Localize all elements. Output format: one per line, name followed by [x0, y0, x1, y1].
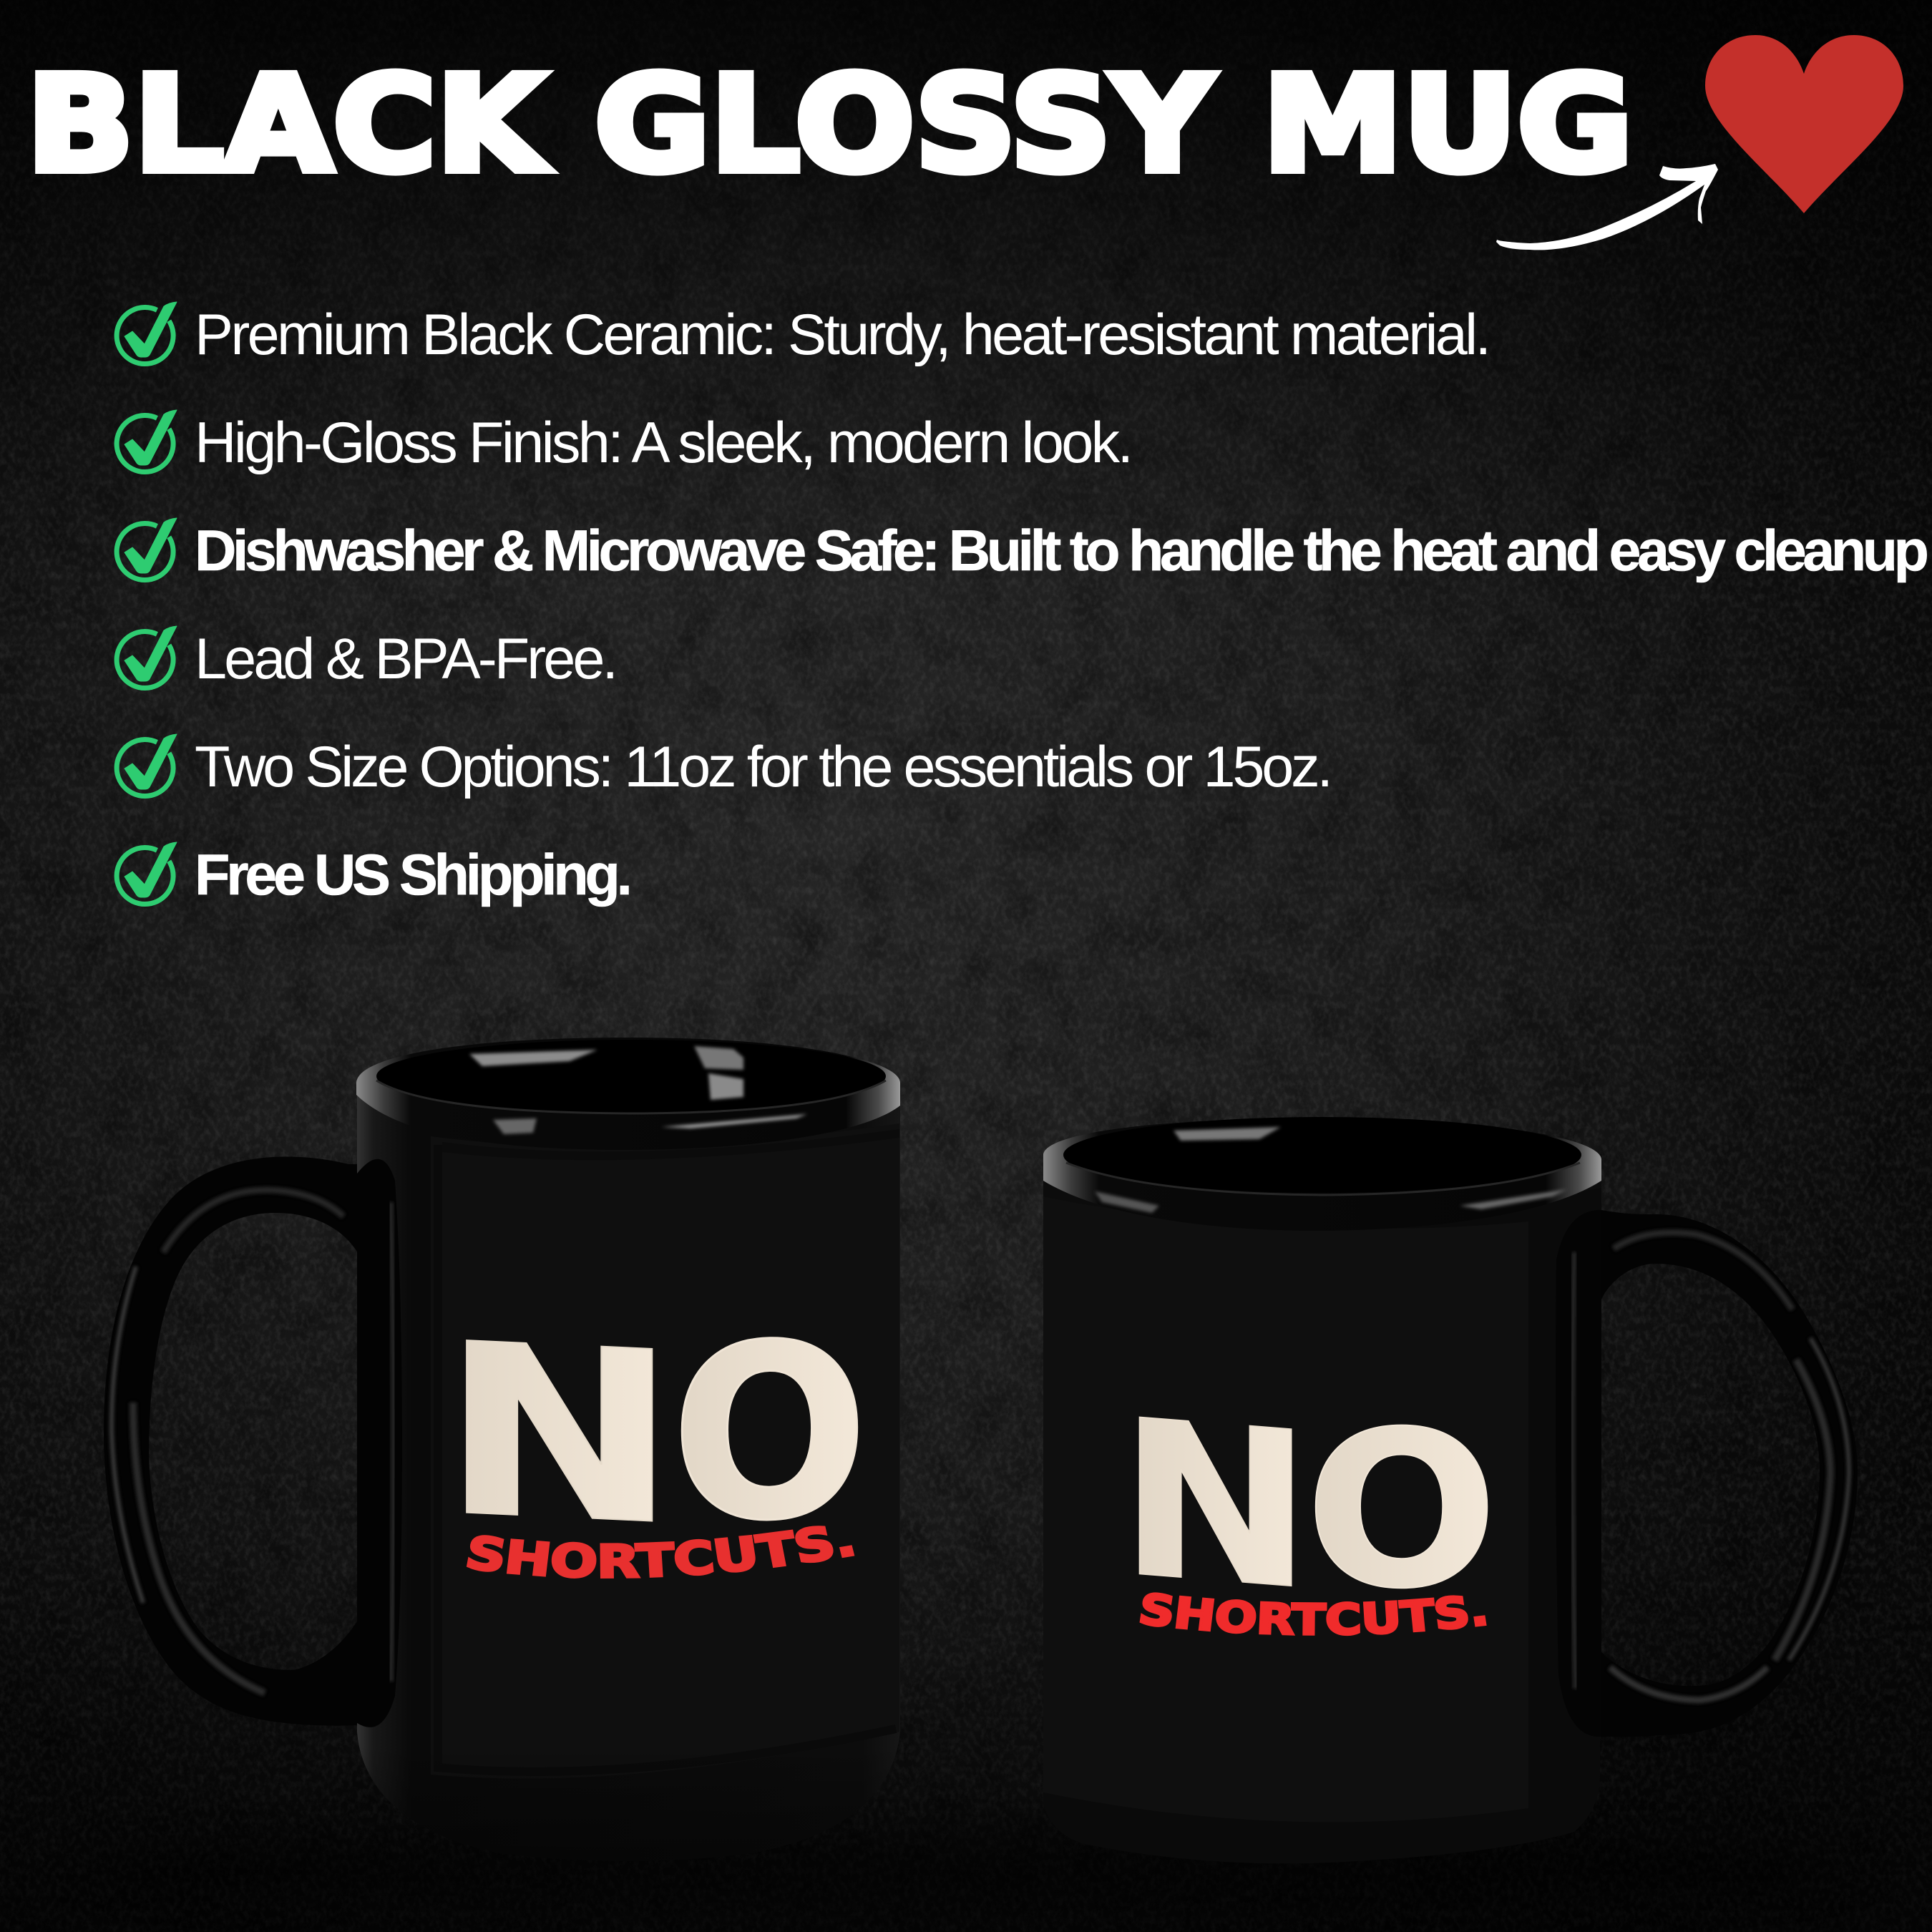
left mug print panel [431, 1123, 899, 1779]
right mug body [1043, 1154, 1601, 1863]
left mug (15oz) [104, 1038, 900, 1816]
left mug print: NO [441, 1292, 869, 1579]
floor shadow beneath mugs [72, 1825, 1860, 1911]
right mug print: NO: O [1304, 1385, 1498, 1636]
right mug print: NO: N [1118, 1373, 1312, 1638]
feature 3: Dishwasher & Microwave Safe: Built to handle the heat and easy cleanup [195, 519, 1929, 583]
left mug print: NO: N [441, 1292, 678, 1579]
right mug handle joint [1556, 1210, 1601, 1737]
feature 2: High-Gloss Finish: A sleek, modern look. [195, 411, 1133, 475]
right mug rim [1043, 1117, 1601, 1231]
right mug print: SHORTCUTS.: SHORTCUTS. [1139, 1592, 1487, 1636]
right mug print panel [1043, 1189, 1528, 1823]
left mug lower shading [357, 1083, 900, 1861]
left mug print: NO: O [670, 1292, 869, 1576]
right mug print: NO [1118, 1373, 1498, 1638]
feature 5: Two Size Options: 11oz for the essentials or 15oz. [195, 735, 1333, 799]
left mug handle [104, 1156, 365, 1726]
arrow pointing to heart [1496, 164, 1718, 250]
left mug rim [356, 1038, 900, 1150]
right mug handle [1592, 1210, 1858, 1737]
feature list [117, 302, 1929, 907]
feature 6: Free US Shipping. [195, 843, 633, 907]
left mug print: SHORTCUTS.: SHORTCUTS. [467, 1526, 854, 1579]
left mug body [357, 1083, 900, 1861]
title: BLACK GLOSSY MUG [26, 49, 1633, 202]
left mug handle joint [357, 1159, 402, 1727]
feature 4: Lead & BPA-Free. [195, 627, 618, 691]
right mug (11oz) [1043, 1117, 1858, 1822]
feature 1: Premium Black Ceramic: Sturdy, heat-resistant material. [195, 303, 1491, 367]
icon: red heart [1705, 35, 1903, 213]
